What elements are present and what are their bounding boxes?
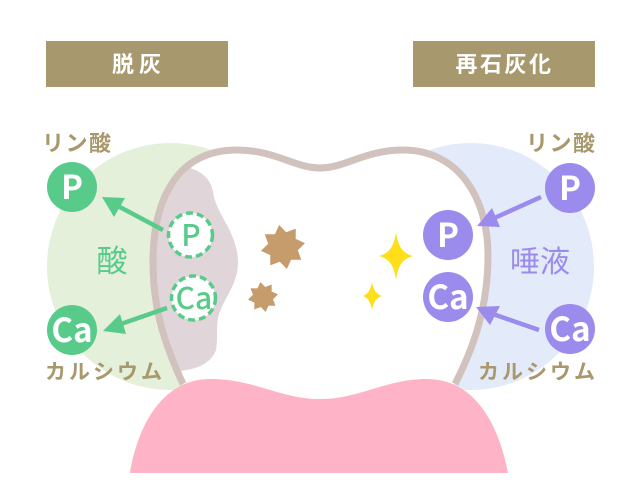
arrow: Ca entering tooth xyxy=(476,306,539,330)
gum xyxy=(130,379,508,473)
banner: remineralisation: 再石灰化 xyxy=(455,52,554,77)
demineralised stain xyxy=(153,168,238,371)
icon: large sparkle xyxy=(379,232,413,280)
icon: purple P circle right: P xyxy=(559,162,581,210)
banner: demineralisation: 脱灰 xyxy=(112,52,166,77)
tooth outline xyxy=(153,150,488,384)
label: acid: 酸 xyxy=(96,244,128,279)
icon: green Ca circle: Ca xyxy=(51,304,93,352)
icon: purple P circle right xyxy=(545,162,595,213)
arrow: P entering tooth xyxy=(477,197,541,227)
label: calcium right: カルシウム xyxy=(478,361,598,384)
arrow: Ca leaving tooth xyxy=(103,308,167,334)
panel: saliva background circle xyxy=(347,143,594,390)
label: phosphoric acid right: リン酸 xyxy=(526,131,597,156)
label: phosphoric acid left: リン酸 xyxy=(42,131,113,156)
banner: demineralisation xyxy=(46,41,228,87)
icon: purple Ca circle right: Ca xyxy=(549,303,591,351)
panel: acid background circle xyxy=(47,143,294,390)
icon: purple P circle on tooth: P xyxy=(437,209,459,257)
label: saliva: 唾液 xyxy=(510,246,570,279)
arrow: P leaving tooth xyxy=(102,197,163,230)
icon: green P circle xyxy=(47,161,97,212)
icon: green P circle: P xyxy=(61,161,83,209)
icon: large cavity stain xyxy=(262,226,304,268)
icon: dashed P circle: P xyxy=(181,211,201,255)
icon: dashed P circle xyxy=(168,211,212,257)
label: calcium left: カルシウム xyxy=(45,361,165,384)
icon: small cavity stain xyxy=(249,283,277,311)
icon: purple P circle on tooth xyxy=(423,209,473,260)
banner: remineralisation xyxy=(413,41,595,87)
tooth body and outline xyxy=(153,150,488,384)
icon: small sparkle xyxy=(363,282,382,310)
icon: purple Ca circle on tooth: Ca xyxy=(427,271,469,319)
icon: dashed Ca circle: Ca xyxy=(176,274,212,318)
